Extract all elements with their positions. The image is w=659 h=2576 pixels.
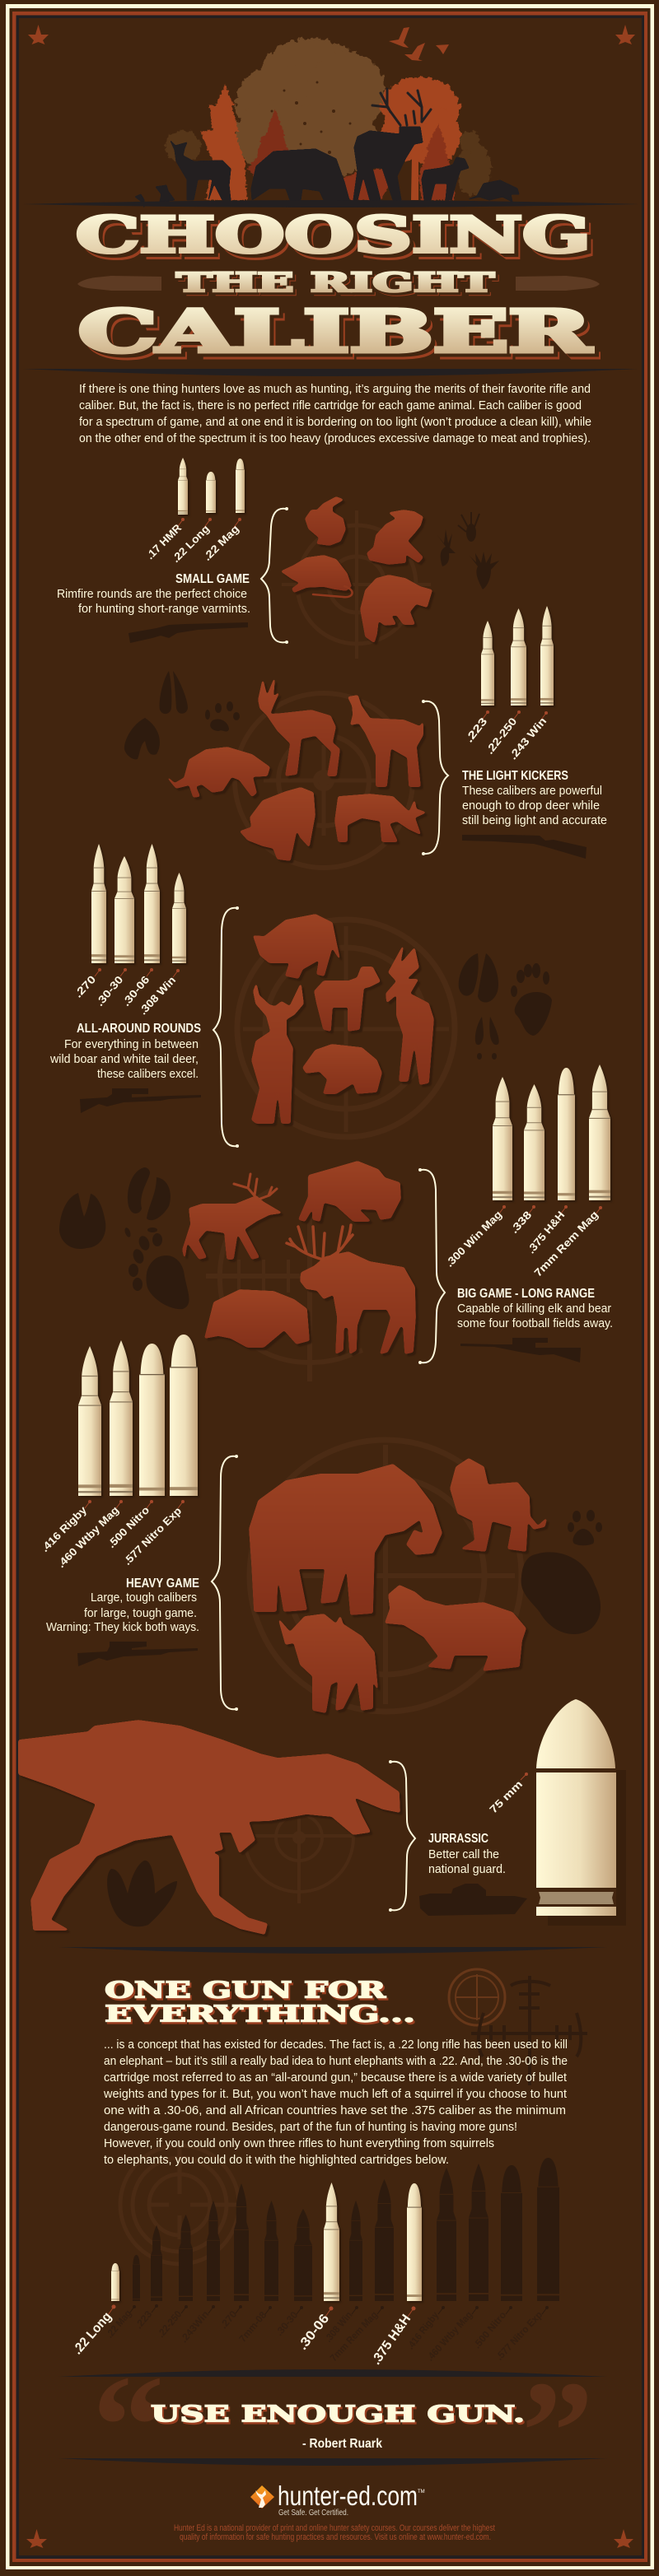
heading and text	[46, 1577, 199, 1634]
trademark: TM	[418, 2490, 425, 2494]
ground line	[23, 200, 638, 207]
rifle icon with scope	[77, 1642, 198, 1666]
speckles in the brown tree	[270, 81, 351, 154]
30-06 highlighted	[296, 2182, 339, 2353]
30-30: .30-30	[273, 2309, 301, 2338]
7mm Rem Mag	[328, 2179, 394, 2364]
panther	[469, 180, 519, 202]
heading and text	[462, 769, 607, 827]
CHOOSING: CHOOSING	[80, 210, 595, 268]
30-06 highlighted: .30-06	[296, 2312, 332, 2353]
heading: EVERYTHING...	[106, 2003, 417, 2029]
cartridge 338: .338	[507, 1209, 534, 1236]
460 Wtby Mag: .460 Wtby Mag	[424, 2309, 474, 2363]
.22 Long highlighted	[71, 2263, 119, 2357]
star bottom left	[26, 2529, 47, 2548]
500 Nitro: .500 Nitro	[471, 2309, 508, 2350]
THE RIGHT: THE RIGHT	[179, 269, 497, 300]
bracket	[213, 906, 239, 1148]
footer text: quality of information for safe hunting practices and resources. Visit us online at www.hunter-ed.com.	[180, 2532, 491, 2542]
scope reticle	[237, 920, 455, 1137]
scope reticle	[250, 1440, 521, 1712]
cartridge 460 Wtby Mag: .460 Wtby Mag	[55, 1503, 121, 1570]
big game tracks	[59, 1167, 189, 1309]
rust leafy tree	[381, 77, 460, 165]
heavy game tracks	[521, 1510, 602, 1634]
heading and text: SMALL GAME	[175, 572, 250, 586]
whitetail deer	[252, 985, 303, 1123]
cartridge 308 Win: .308 Win	[137, 974, 178, 1017]
gazelle	[259, 679, 339, 776]
heading and text: These calibers are powerful	[462, 785, 602, 798]
chamois	[348, 696, 423, 786]
rifle icon	[462, 835, 587, 859]
all-around tracks	[459, 953, 552, 1060]
heading and text: Rimfire rounds are the perfect choice	[57, 588, 247, 601]
.416 Rigby: .416 Rigby	[404, 2309, 442, 2351]
body text	[103, 2038, 568, 2167]
scope reticle dark	[471, 1976, 587, 2085]
panel: quote	[92, 2345, 593, 2511]
grazing deer	[335, 794, 425, 841]
CHOOSING	[76, 207, 596, 270]
cartridge .17 HMR	[143, 458, 188, 561]
cartridge .243 Win	[507, 606, 554, 762]
bullet left of subtitle	[77, 276, 161, 291]
bracket	[389, 1760, 415, 1912]
cartridge 30-06: .30-06	[119, 973, 152, 1009]
cartridge 300 Win Mag	[443, 1077, 512, 1269]
heading and text	[457, 1287, 613, 1330]
scope reticle	[243, 1782, 354, 1903]
ram	[422, 157, 469, 200]
body text: to elephants, you could do it with the highlighted cartridges below.	[104, 2154, 449, 2167]
heading and text: national guard.	[428, 1863, 506, 1876]
.223	[133, 2225, 162, 2331]
doe	[171, 141, 231, 200]
heading and text: wild boar and white tail deer,	[49, 1053, 199, 1066]
divider	[58, 2458, 607, 2466]
.22-250: .22-250	[155, 2308, 184, 2340]
intro text: for a spectrum of game, and at one end it is bordering on too light (won’t produce a clean kill), while	[79, 416, 591, 429]
elephant	[250, 1465, 442, 1614]
heading and text: these calibers excel.	[97, 1068, 199, 1081]
bracket	[418, 1168, 445, 1364]
quote: USE ENOUGH GUN.	[152, 2403, 526, 2429]
heading and text: For everything in between	[64, 1038, 199, 1051]
7mm-08	[236, 2201, 278, 2345]
.22 Mag: .22 Mag	[104, 2308, 133, 2341]
bullet right of subtitle	[516, 276, 600, 291]
rabbit	[156, 185, 175, 202]
cartridge .416 Rigby	[39, 1346, 101, 1554]
heading and text: enough to drop deer while	[462, 799, 600, 813]
elk	[183, 1174, 281, 1259]
footer text: Hunter Ed is a national provider of print and online hunter safety courses. Our courses deliver the highest	[174, 2523, 495, 2533]
darker side bushes	[165, 130, 491, 195]
.270: .270	[217, 2308, 240, 2331]
intro text: caliber. But, the fact is, there is no perfect rifle cartridge for each game animal. Each caliber is good	[79, 399, 582, 412]
577 Nitro Exp: .577 Nitro Exp	[493, 2308, 544, 2363]
7mm Rem Mag: 7mm Rem Mag	[328, 2308, 380, 2364]
rifle icon with scope	[460, 1338, 581, 1363]
heading and text: for hunting short-range varmints.	[78, 603, 250, 616]
375 H&H highlighted: .375 H&H	[369, 2313, 414, 2368]
bracket	[212, 1455, 238, 1711]
moose	[287, 1225, 415, 1353]
cape buffalo	[279, 1614, 377, 1712]
huge 75 mm cartridge	[536, 1699, 626, 1926]
opening quote mark: “	[92, 2345, 165, 2505]
cartridge .22 Long: .22 Long	[170, 522, 212, 565]
panel: all-around rounds	[49, 844, 552, 1148]
logo diamond with stag	[250, 2485, 274, 2508]
red conifer right	[418, 123, 455, 200]
heading: EVERYTHING...	[105, 2001, 415, 2027]
squirrel	[306, 497, 345, 545]
cartridge 500 Nitro: .500 Nitro	[105, 1503, 152, 1550]
orange conifer left	[200, 84, 247, 200]
cartridge .270	[72, 844, 106, 1000]
500 Nitro	[471, 2165, 522, 2350]
cartridge .270: .270	[72, 973, 98, 1000]
t-rex	[19, 1721, 400, 1934]
cartridge .243 Win: .243 Win	[507, 715, 549, 762]
bison	[299, 1162, 400, 1221]
cartridge 375 H&H: .375 H&H	[525, 1209, 567, 1255]
ram	[315, 967, 380, 1031]
THE RIGHT: THE RIGHT	[180, 270, 498, 301]
title	[76, 207, 600, 371]
cartridge .22 Mag: .22 Mag	[201, 522, 241, 563]
THE RIGHT	[176, 267, 498, 301]
308 Win	[322, 2201, 362, 2345]
bracket	[422, 700, 448, 855]
cartridge 338	[507, 1084, 544, 1236]
star top left	[28, 25, 49, 44]
logo wordmark: hunter-ed.com	[278, 2481, 418, 2511]
heading and text: BIG GAME - LONG RANGE	[457, 1287, 595, 1301]
body text: an elephant – but it’s still a really bad idea to hunt elephants with a .22. And, the .30-06 is the	[104, 2055, 568, 2068]
heading and text	[57, 572, 250, 616]
heading and text: ALL-AROUND ROUNDS	[77, 1022, 201, 1036]
heading and text: for large, tough game.	[84, 1607, 197, 1620]
body text: dangerous-game round. Besides, part of the fun of hunting is having more guns!	[104, 2121, 517, 2134]
bear	[205, 1290, 309, 1347]
panther	[168, 748, 269, 797]
CHOOSING: CHOOSING	[82, 212, 596, 270]
heading and text: Capable of killing elk and bear	[457, 1302, 611, 1316]
scope reticle rust	[449, 1969, 505, 2025]
scope reticle	[206, 1177, 371, 1381]
375 H&H highlighted	[369, 2183, 422, 2368]
.416 Rigby	[404, 2168, 456, 2351]
intro text: If there is one thing hunters love as much as hunting, it’s arguing the merits of their favorite rifle and	[79, 383, 591, 396]
CALIBER: CALIBER	[84, 303, 597, 371]
cartridge .223	[463, 621, 494, 745]
quote: USE ENOUGH GUN.	[151, 2401, 525, 2427]
intro text	[79, 383, 591, 445]
cartridge .17 HMR: .17 HMR	[143, 521, 185, 561]
.22-250	[155, 2215, 193, 2340]
panel: small game	[57, 458, 499, 659]
heading and text: some four football fields away.	[457, 1317, 613, 1330]
cartridge lineup chart	[71, 2158, 559, 2368]
body text: one with a .30-06, and all African countries have set the .375 caliber as the minimum	[104, 2104, 566, 2117]
30-30	[273, 2209, 312, 2338]
panel: big game - long range	[59, 1064, 613, 1381]
cartridge 308 Win	[137, 873, 186, 1017]
cartridge .22 Long	[170, 472, 216, 565]
hippo	[386, 1586, 526, 1670]
bear	[251, 149, 349, 200]
cartridge 7mm Rem Mag: 7mm Rem Mag	[531, 1209, 601, 1279]
cartridge 30-30: .30-30	[93, 973, 125, 1009]
stag	[353, 89, 431, 200]
body text: ... is a concept that has existed for decades. The fact is, a .22 long rifle has been used to kill	[104, 2038, 568, 2052]
heading and text: HEAVY GAME	[126, 1577, 199, 1591]
background brown trees	[234, 38, 386, 178]
heading and text: JURRASSIC	[428, 1832, 488, 1846]
heading: ONE GUN FOR	[105, 1977, 387, 2004]
cartridge 22-250: .22-250	[484, 715, 519, 757]
red conifer centre	[247, 109, 302, 185]
panel: the light kickers	[124, 606, 607, 868]
.223: .223	[133, 2308, 155, 2331]
308 Win: .308 Win	[322, 2309, 354, 2345]
lion	[451, 1459, 546, 1551]
small game tracks	[437, 512, 499, 589]
cartridge 577 Nitro Exp: .577 Nitro Exp	[121, 1504, 184, 1567]
warthog	[241, 788, 315, 860]
CALIBER	[78, 297, 597, 371]
tank icon	[419, 1884, 527, 1916]
cartridge 375 H&H	[525, 1068, 575, 1255]
cartridge 30-30	[93, 856, 134, 1009]
.270	[217, 2183, 249, 2331]
bracket	[261, 507, 288, 644]
closing quote mark: ”	[521, 2351, 593, 2511]
heading and text	[49, 1022, 201, 1081]
577 Nitro Exp	[493, 2158, 559, 2363]
heading and text: THE LIGHT KICKERS	[462, 769, 568, 783]
heading	[105, 1977, 417, 2029]
cartridge 30-06	[119, 844, 160, 1009]
star bottom right	[614, 2529, 633, 2548]
rat	[282, 556, 353, 597]
light game tracks	[124, 671, 240, 759]
heading and text	[428, 1832, 506, 1876]
tree trunk	[411, 156, 418, 200]
cartridge 22-250	[484, 608, 526, 757]
.243 Win	[178, 2201, 220, 2345]
antelope	[386, 947, 433, 1084]
footer text	[174, 2523, 495, 2542]
.243 Win: .243Win	[178, 2308, 211, 2345]
star top right	[615, 25, 635, 44]
boar	[254, 915, 339, 978]
body text: cartridge most referred to as an “all-around gun,” because there is a wide variety of bullet	[104, 2071, 567, 2085]
birds	[389, 27, 449, 61]
panel: heavy game	[39, 1335, 602, 1712]
heading and text: Better call the	[428, 1848, 499, 1861]
460 Wtby Mag	[424, 2164, 488, 2363]
heading: ONE GUN FOR	[106, 1979, 389, 2005]
body text: However, if you could only own three rifles to hunt everything from squirrels	[104, 2137, 494, 2150]
scope reticle	[235, 693, 413, 868]
dinosaur footprint	[107, 1861, 177, 1926]
quote	[151, 2401, 526, 2429]
.22 Mag	[104, 2255, 140, 2341]
divider	[23, 369, 638, 376]
label 75 mm: 75 mm	[487, 1778, 525, 1815]
body text: weights and types for it. But, you won’t have much left of a squirrel if you choose to hunt	[103, 2088, 567, 2101]
heading and text: Warning: They kick both ways.	[46, 1621, 199, 1634]
cartridge .416 Rigby: .416 Rigby	[39, 1503, 90, 1554]
logo tagline: Get Safe. Get Certified.	[278, 2508, 348, 2518]
cartridge 300 Win Mag: .300 Win Mag	[443, 1208, 504, 1269]
cartridge 500 Nitro	[105, 1344, 165, 1550]
red undergrowth	[341, 168, 394, 200]
cartridge .223: .223	[463, 715, 489, 745]
logo	[250, 2481, 425, 2518]
divider	[58, 1947, 607, 1954]
attribution: - Robert Ruark	[302, 2437, 382, 2451]
scope reticle rings	[120, 2140, 239, 2264]
heading and text: Large, tough calibers	[91, 1591, 197, 1605]
rifle icon with scope	[80, 1088, 201, 1113]
cartridge .22 Mag	[201, 459, 245, 563]
heading and text: still being light and accurate	[462, 814, 607, 827]
.22 Long highlighted: .22 Long	[71, 2309, 115, 2357]
THE RIGHT: THE RIGHT	[176, 267, 494, 298]
bear	[303, 1045, 381, 1093]
CHOOSING: CHOOSING	[76, 207, 591, 264]
cartridge 577 Nitro Exp	[121, 1335, 198, 1567]
rifle icon	[129, 622, 248, 643]
scope reticle	[282, 510, 431, 659]
squirrel	[135, 194, 144, 207]
CALIBER: CALIBER	[78, 297, 591, 366]
intro text: on the other end of the spectrum it is too heavy (produces excessive damage to meat and trophies).	[79, 432, 591, 445]
panel: one gun for everything	[71, 1969, 587, 2368]
raccoon	[361, 575, 432, 642]
cartridge 460 Wtby Mag	[55, 1340, 133, 1570]
label 75 mm	[487, 1772, 528, 1815]
divider	[58, 2369, 607, 2377]
7mm-08: 7mm-08	[236, 2309, 269, 2345]
header forest illustration	[23, 27, 638, 207]
cartridge 7mm Rem Mag	[531, 1064, 610, 1279]
rabbit	[367, 510, 423, 564]
CALIBER: CALIBER	[82, 300, 596, 369]
panel: jurrassic	[19, 1699, 626, 1934]
